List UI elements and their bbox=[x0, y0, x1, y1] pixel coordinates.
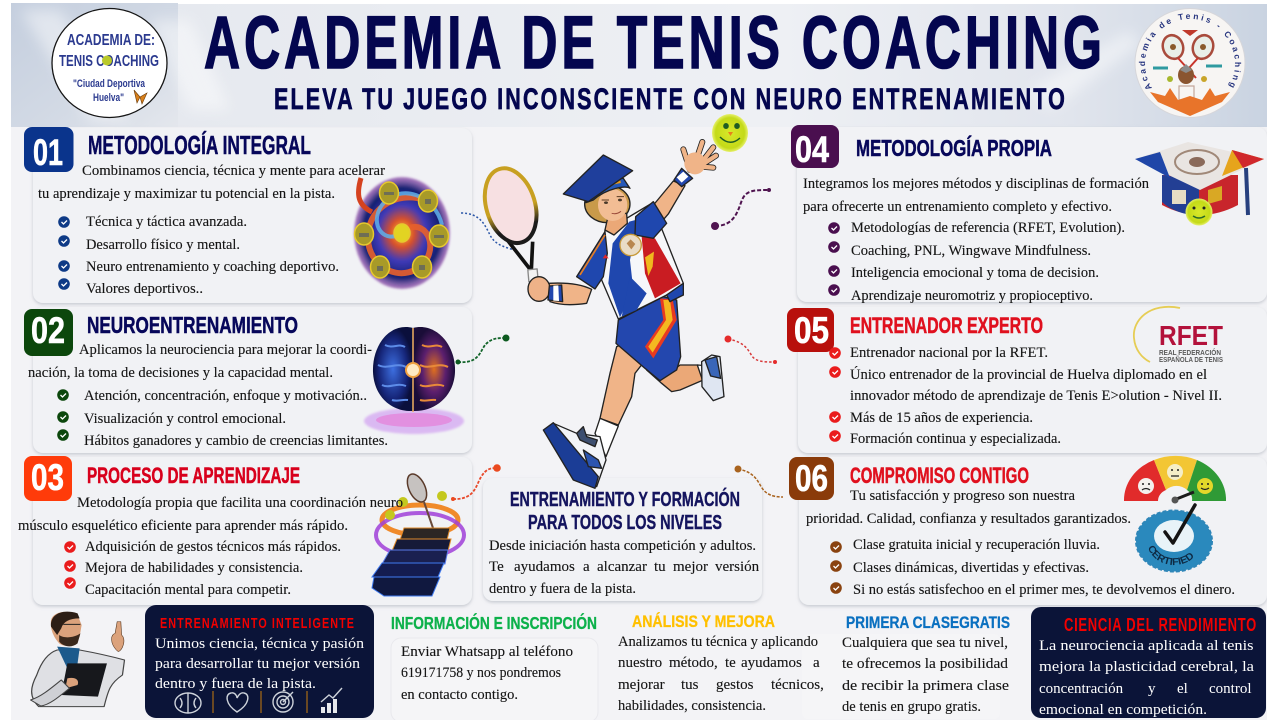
description bbox=[842, 635, 1009, 715]
badge 04: 04 bbox=[795, 129, 829, 170]
panel 02: neuroentrenamiento bbox=[24, 307, 472, 453]
description: ayudamos bbox=[741, 655, 802, 671]
icon: satisfaction gauge bbox=[1124, 456, 1226, 504]
description: La neurociencia aplicada al tenis bbox=[1039, 638, 1254, 654]
checklist 05: Único entrenador de la provincial de Huelva diplomado en el bbox=[850, 366, 1207, 383]
heading 02: NEUROENTRENAMIENTO bbox=[87, 312, 298, 338]
description 01 bbox=[38, 163, 385, 202]
checklist 04: Coaching, PNL, Wingwave Mindfulness. bbox=[851, 243, 1091, 259]
icon: certified seal bbox=[1135, 503, 1213, 572]
player torso, arms and racket bbox=[476, 142, 716, 319]
checklist 06 bbox=[830, 537, 1235, 598]
description: nuestro bbox=[618, 655, 662, 671]
description bbox=[618, 634, 824, 714]
description 04 bbox=[803, 176, 1149, 215]
description: de recibir la primera clase bbox=[842, 678, 1009, 694]
heading: ENTRENAMIENTO INTELIGENTE bbox=[160, 615, 355, 632]
description 02: nación, la toma de decisiones y la capacidad mental. bbox=[28, 365, 333, 381]
panel: análisis y mejora bbox=[618, 612, 824, 714]
connector: purple dotted curve bbox=[711, 188, 771, 230]
logo: RFET: ESPAÑOLA DE TENIS bbox=[1159, 355, 1223, 364]
panel 04: metodología propia bbox=[791, 125, 1267, 304]
description: y bbox=[1148, 681, 1156, 697]
panel: primera clase gratis bbox=[802, 613, 1010, 719]
checklist 05 bbox=[829, 345, 1222, 447]
description: tus bbox=[681, 677, 699, 693]
checklist 05: Entrenador nacional por la RFET. bbox=[850, 345, 1048, 361]
description centre bbox=[489, 538, 760, 597]
checklist 05: Formación continua y especializada. bbox=[850, 431, 1061, 447]
checklist 02: Atención, concentración, enfoque y motivación.. bbox=[84, 388, 367, 404]
description: para desarrollar tu mejor versión bbox=[155, 656, 361, 672]
contact text: Enviar Whatsapp al teléfono bbox=[401, 644, 573, 660]
heading: INFORMACIÓN E INSCRIPCIÓN bbox=[391, 612, 597, 633]
heading centre: PARA TODOS LOS NIVELES bbox=[528, 512, 722, 534]
description centre: Te bbox=[489, 559, 504, 575]
description: gestos bbox=[716, 677, 754, 693]
racket bbox=[476, 162, 545, 282]
description centre: a bbox=[583, 559, 590, 575]
contact text bbox=[401, 644, 573, 703]
description: mejora la plasticidad cerebral, la bbox=[1039, 659, 1254, 675]
description: Unimos ciencia, técnica y pasión bbox=[155, 636, 365, 652]
badge 06: 06 bbox=[795, 458, 828, 499]
description: Cualquiera que sea tu nivel, bbox=[842, 635, 1008, 651]
description: técnicos, bbox=[771, 677, 824, 693]
description 06: Tu satisfacción y progreso son nuestra bbox=[850, 488, 1075, 504]
checklist 02: Hábitos ganadores y cambio de creencias limitantes. bbox=[84, 433, 388, 449]
heading 04: METODOLOGÍA PROPIA bbox=[856, 134, 1052, 161]
logo: emblem: Academia de Tenis - Coaching bbox=[1138, 14, 1242, 89]
panel 01: metodología integral bbox=[24, 127, 472, 303]
icon row bbox=[175, 688, 342, 713]
heading 06: COMPROMISO CONTIGO bbox=[850, 463, 1029, 488]
logo: Academia de Tenis Coaching: Huelva" bbox=[93, 92, 124, 104]
panel: ciencia del rendimiento bbox=[1031, 607, 1266, 718]
description centre: mejor bbox=[673, 559, 708, 575]
checklist 01: Neuro entrenamiento y coaching deportivo. bbox=[86, 259, 339, 275]
connector: brown dotted curve bbox=[734, 466, 783, 497]
connector: crimson dotted curve bbox=[724, 336, 777, 364]
description 03: Metodología propia que facilita una coordinación neuro bbox=[77, 495, 403, 511]
connector: green dotted curve bbox=[456, 334, 510, 364]
heading: PRIMERA CLASEGRATIS bbox=[846, 613, 1010, 632]
checklist 02: Visualización y control emocional. bbox=[84, 411, 286, 427]
checklist 01: Desarrollo físico y mental. bbox=[86, 237, 240, 253]
description: te bbox=[725, 655, 736, 671]
description 01: tu aprendizaje y maximizar tu potencial en la pista. bbox=[38, 186, 335, 202]
icon: staircase with racket bbox=[372, 471, 464, 596]
logo: RFET bbox=[1134, 307, 1223, 364]
badge 03: 03 bbox=[31, 457, 64, 498]
description: método, bbox=[669, 655, 718, 671]
checklist 05: innovador método de aprendizaje de Tenis E>olution - Nivel II. bbox=[850, 388, 1222, 404]
checklist 03 bbox=[64, 539, 341, 598]
description: a bbox=[813, 655, 820, 671]
checklist 03: Mejora de habilidades y consistencia. bbox=[85, 560, 303, 576]
player legs bbox=[543, 297, 724, 488]
description 03 bbox=[18, 495, 403, 534]
description: habilidades, consistencia. bbox=[618, 698, 766, 714]
logo: RFET: RFET bbox=[1159, 320, 1223, 351]
heading 03: PROCESO DE APRENDIZAJE bbox=[87, 463, 300, 488]
connector: blue dotted curve bbox=[461, 213, 514, 250]
description: concentración bbox=[1039, 681, 1124, 697]
badge 02: 02 bbox=[31, 310, 65, 351]
description centre: versión bbox=[715, 559, 760, 575]
panel: entrenamiento inteligente bbox=[145, 605, 374, 718]
description: mejorar bbox=[618, 677, 665, 693]
panel 03: proceso de aprendizaje bbox=[18, 456, 472, 605]
description: el bbox=[1177, 681, 1188, 697]
heading centre: ENTRENAMIENTO Y FORMACIÓN bbox=[510, 487, 740, 511]
description centre: tu bbox=[654, 559, 666, 575]
icon: graduation cap with ball bbox=[1135, 142, 1264, 226]
checklist 04: Inteligencia emocional y toma de decision. bbox=[851, 265, 1099, 281]
description: dentro y fuera de la pista. bbox=[155, 676, 316, 692]
panel: información e inscripción bbox=[391, 612, 598, 720]
checklist 06: Clase gratuita inicial y recuperación lluvia. bbox=[853, 537, 1100, 553]
checklist 06: Clases dinámicas, divertidas y efectivas. bbox=[853, 560, 1089, 576]
logo: RFET: REAL FEDERACIÓN bbox=[1159, 348, 1221, 357]
logo: Academia de Tenis Coaching: "Ciudad Deportiva bbox=[73, 78, 146, 90]
logo: Academia de Tenis Coaching bbox=[52, 8, 167, 118]
description 02: Aplicamos la neurociencia para mejorar la coordi- bbox=[79, 342, 372, 358]
checklist 04: Aprendizaje neuromotriz y propioceptivo. bbox=[851, 288, 1093, 304]
description 04: Integramos los mejores métodos y disciplinas de formación bbox=[803, 176, 1149, 192]
description bbox=[1039, 638, 1254, 718]
panel 06: compromiso contigo bbox=[789, 456, 1267, 608]
logo: Academia de Tenis Coaching: ACADEMIA DE: bbox=[67, 32, 155, 49]
icon: certified seal: CERTIFIED bbox=[1148, 546, 1193, 566]
description 06: prioridad. Calidad, confianza y resultados garantizados. bbox=[806, 511, 1131, 527]
checklist 05: Más de 15 años de experiencia. bbox=[850, 410, 1033, 426]
description bbox=[155, 636, 365, 692]
description 04: para ofrecerte un entrenamiento completo y efectivo. bbox=[803, 199, 1112, 215]
description 03: músculo esquelético eficiente para aprender más rápido. bbox=[18, 518, 348, 534]
contact text: 619171758 y nos pondremos bbox=[401, 665, 561, 681]
badge 05: 05 bbox=[794, 310, 829, 351]
checklist 06: Si no estás satisfechoo en el primer mes, te devolvemos el dinero. bbox=[853, 582, 1235, 598]
panel: entrenamiento y formación bbox=[483, 478, 762, 601]
icon: galaxy swirl with seven golden circles bbox=[354, 177, 450, 289]
heading 01: METODOLOGÍA INTEGRAL bbox=[88, 130, 311, 160]
checklist 03: Adquisición de gestos técnicos más rápidos. bbox=[85, 539, 341, 555]
description: te ofrecemos la posibilidad bbox=[842, 656, 1008, 672]
heading 05: ENTRENADOR EXPERTO bbox=[850, 313, 1043, 338]
panel 05: entrenador experto bbox=[787, 307, 1267, 453]
checklist 01: Técnica y táctica avanzada. bbox=[86, 214, 247, 230]
description centre: dentro y fuera de la pista. bbox=[489, 581, 636, 597]
description 06 bbox=[806, 488, 1131, 527]
description centre: alcanzar bbox=[597, 559, 647, 575]
description: Analizamos tu técnica y aplicando bbox=[618, 634, 818, 650]
icon: smiley tennis ball bbox=[712, 114, 748, 152]
player head bbox=[563, 155, 633, 235]
header banner bbox=[11, 1, 1267, 127]
heading: ANÁLISIS Y MEJORA bbox=[632, 612, 775, 631]
description: control bbox=[1209, 681, 1252, 697]
heading centre bbox=[510, 487, 740, 534]
connector: red dotted curve bbox=[451, 464, 501, 501]
illustration: tennis player bbox=[476, 114, 748, 488]
checklist 02 bbox=[57, 388, 388, 449]
icon: glowing brain bbox=[364, 327, 464, 434]
illustration: doctor pointing upward bbox=[31, 612, 125, 707]
checklist 04 bbox=[828, 220, 1125, 304]
checklist 01 bbox=[58, 214, 339, 297]
checklist 04: Metodologías de referencia (RFET, Evolution). bbox=[851, 220, 1125, 236]
badge 01: 01 bbox=[33, 132, 63, 173]
checklist 03: Capacitación mental para competir. bbox=[85, 582, 291, 598]
description: emocional en competición. bbox=[1039, 702, 1207, 718]
description 01: Combinamos ciencia, técnica y mente para acelerar bbox=[82, 163, 385, 179]
contact text: en contacto contigo. bbox=[401, 687, 518, 703]
description: de tenis en grupo gratis. bbox=[842, 699, 981, 715]
description 02 bbox=[28, 342, 372, 381]
logo: Academia de Tenis Coaching: TENIS COACHING bbox=[59, 53, 159, 70]
description centre: Desde iniciación hasta competición y adultos. bbox=[489, 538, 756, 554]
checklist 01: Valores deportivos.. bbox=[86, 281, 203, 297]
description centre: ayudamos bbox=[514, 559, 575, 575]
